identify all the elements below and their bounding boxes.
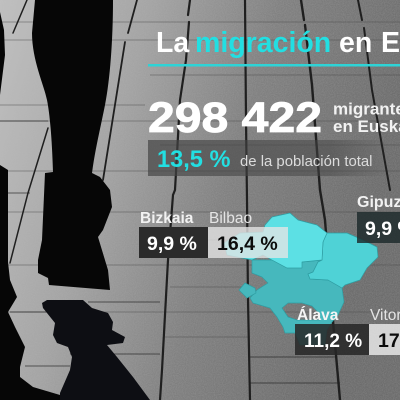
title: en bbox=[339, 27, 372, 59]
Alava value box bbox=[295, 324, 369, 355]
Alava value box: 11,2 % bbox=[304, 331, 362, 352]
Bilbao label: Bilbao bbox=[209, 210, 252, 227]
Gipuzkoa province bbox=[308, 233, 378, 288]
title: migración bbox=[195, 27, 331, 59]
Bizkaia province bbox=[224, 213, 327, 268]
total migrants figure: 298 422 bbox=[148, 94, 322, 142]
silhouette: walking legs and shadow bbox=[0, 0, 150, 400]
Gipuzkoa value box bbox=[357, 212, 400, 243]
Alava exclave bbox=[239, 283, 256, 298]
title underline bbox=[148, 64, 400, 66]
map of the Basque Country bbox=[224, 213, 378, 345]
Bilbao value box: 16,4 % bbox=[217, 233, 278, 255]
title: La bbox=[156, 27, 190, 59]
percent band bbox=[148, 140, 390, 176]
percent value: 13,5 % bbox=[157, 147, 230, 173]
Bizkaia value box: 9,9 % bbox=[147, 233, 197, 255]
percent description: de la población total bbox=[240, 154, 372, 170]
Alava province bbox=[250, 260, 344, 345]
Bizkaia value box bbox=[139, 227, 208, 258]
Vitoria value box bbox=[369, 324, 400, 355]
Bizkaia label: Bizkaia bbox=[140, 210, 194, 227]
Bilbao value box bbox=[208, 227, 288, 258]
Alava label: Álava bbox=[297, 307, 339, 324]
